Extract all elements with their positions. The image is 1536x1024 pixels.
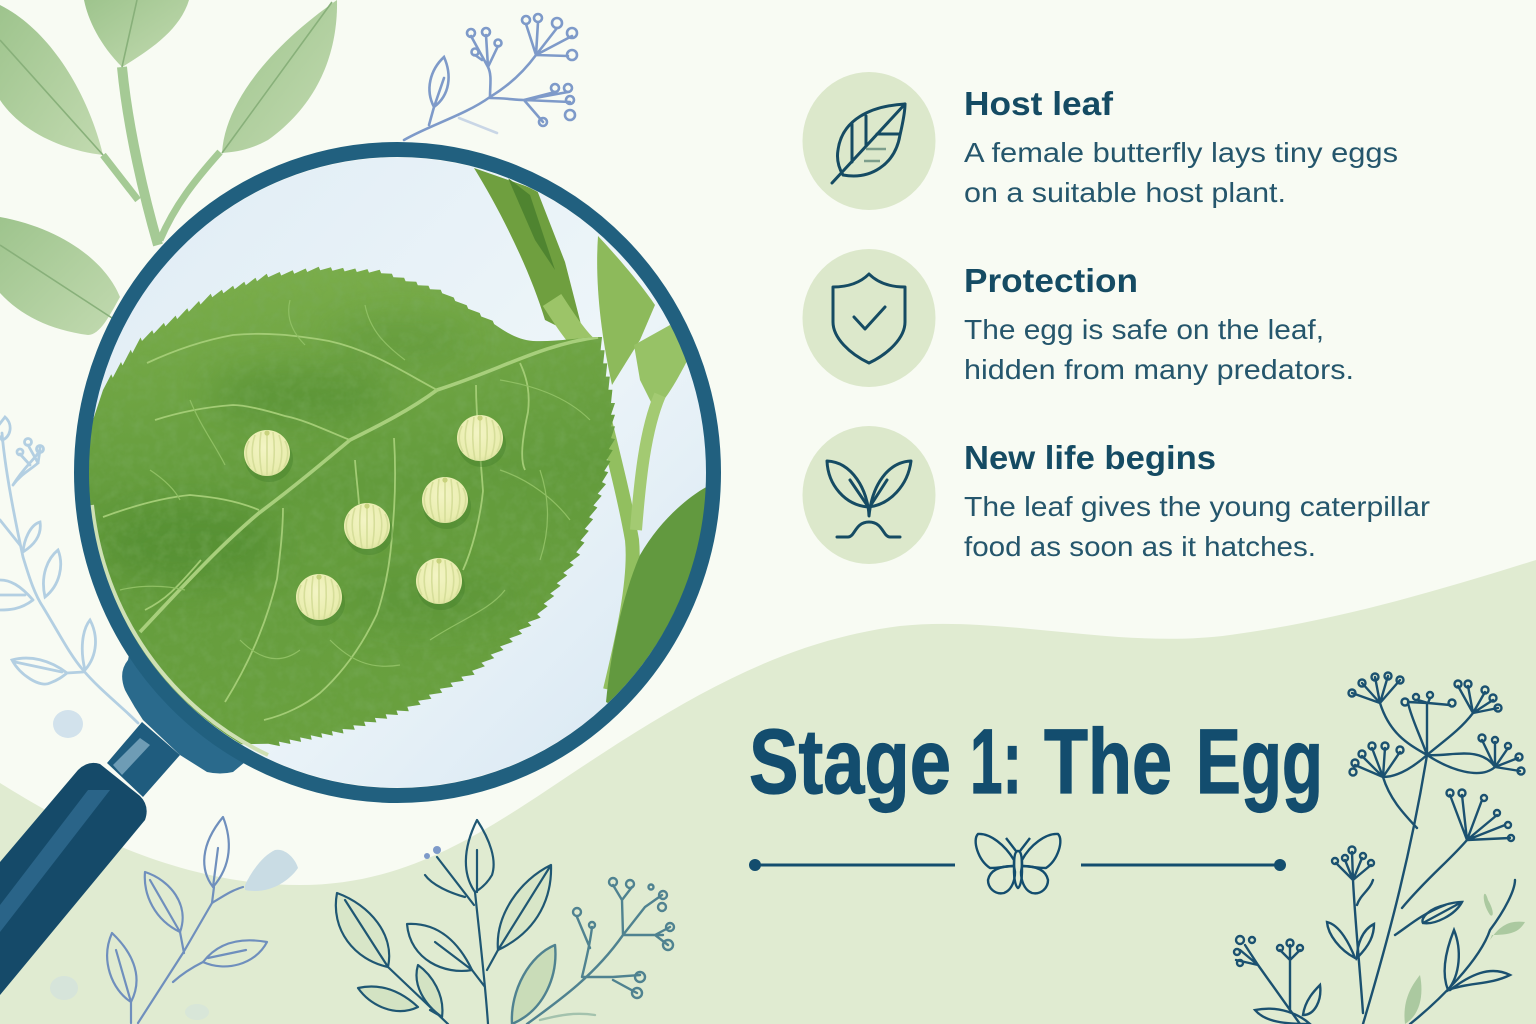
text: new life description: food as soon as it hatches.	[964, 531, 1316, 562]
bottom-center plant right sprig	[424, 846, 674, 1024]
info item: new life begins	[802, 426, 1430, 564]
icon: sprout	[802, 426, 936, 564]
info item: host leaf	[802, 72, 1398, 210]
large leaf with serrated edge	[89, 266, 615, 746]
leaf shading	[114, 328, 436, 580]
main title: Stage	[749, 711, 951, 813]
text: host leaf description: A female butterfly lays tiny eggs	[964, 137, 1398, 168]
bottom-left pale blossoms	[50, 850, 298, 1020]
plant stems behind leaf	[474, 168, 710, 720]
leaf veins	[103, 334, 598, 720]
bottom-right umbel plant	[1234, 672, 1525, 1024]
main title: The	[1044, 711, 1172, 813]
heading: host leaf: Host leaf	[964, 85, 1114, 122]
top-left green foliage	[0, 0, 337, 335]
text: new life description: The leaf gives the young caterpillar	[964, 491, 1430, 522]
lens inner highlight	[92, 505, 268, 755]
butterfly eggs	[244, 415, 506, 626]
magnifying glass collar	[122, 650, 245, 774]
info item: protection	[802, 249, 1354, 387]
divider with butterfly	[749, 834, 1286, 893]
text: protection description: hidden from many predators.	[964, 354, 1354, 385]
lens sky	[88, 158, 706, 788]
text: protection description: The egg is safe on the leaf,	[964, 314, 1324, 345]
heading: new life begins: New life begins	[964, 439, 1216, 476]
text: host leaf description: on a suitable host plant.	[964, 177, 1286, 208]
icon: shield	[802, 249, 936, 387]
heading: protection: Protection	[964, 262, 1138, 299]
magnifying glass handle	[0, 763, 147, 995]
pale blue blossom blob	[53, 710, 83, 738]
lens ring	[82, 150, 714, 796]
magnifying glass neck	[107, 722, 180, 797]
left pale blue plant	[0, 417, 138, 723]
icon: butterfly	[976, 834, 1060, 893]
top blue flower sprig	[404, 14, 577, 140]
bottom-left plant	[107, 817, 267, 1023]
main title: Egg	[1196, 711, 1323, 813]
background wave	[0, 560, 1536, 1024]
main title: 1:	[970, 711, 1022, 813]
magnified lens	[60, 150, 714, 796]
bottom-center plant	[336, 820, 551, 1024]
icon: leaf	[802, 72, 936, 210]
